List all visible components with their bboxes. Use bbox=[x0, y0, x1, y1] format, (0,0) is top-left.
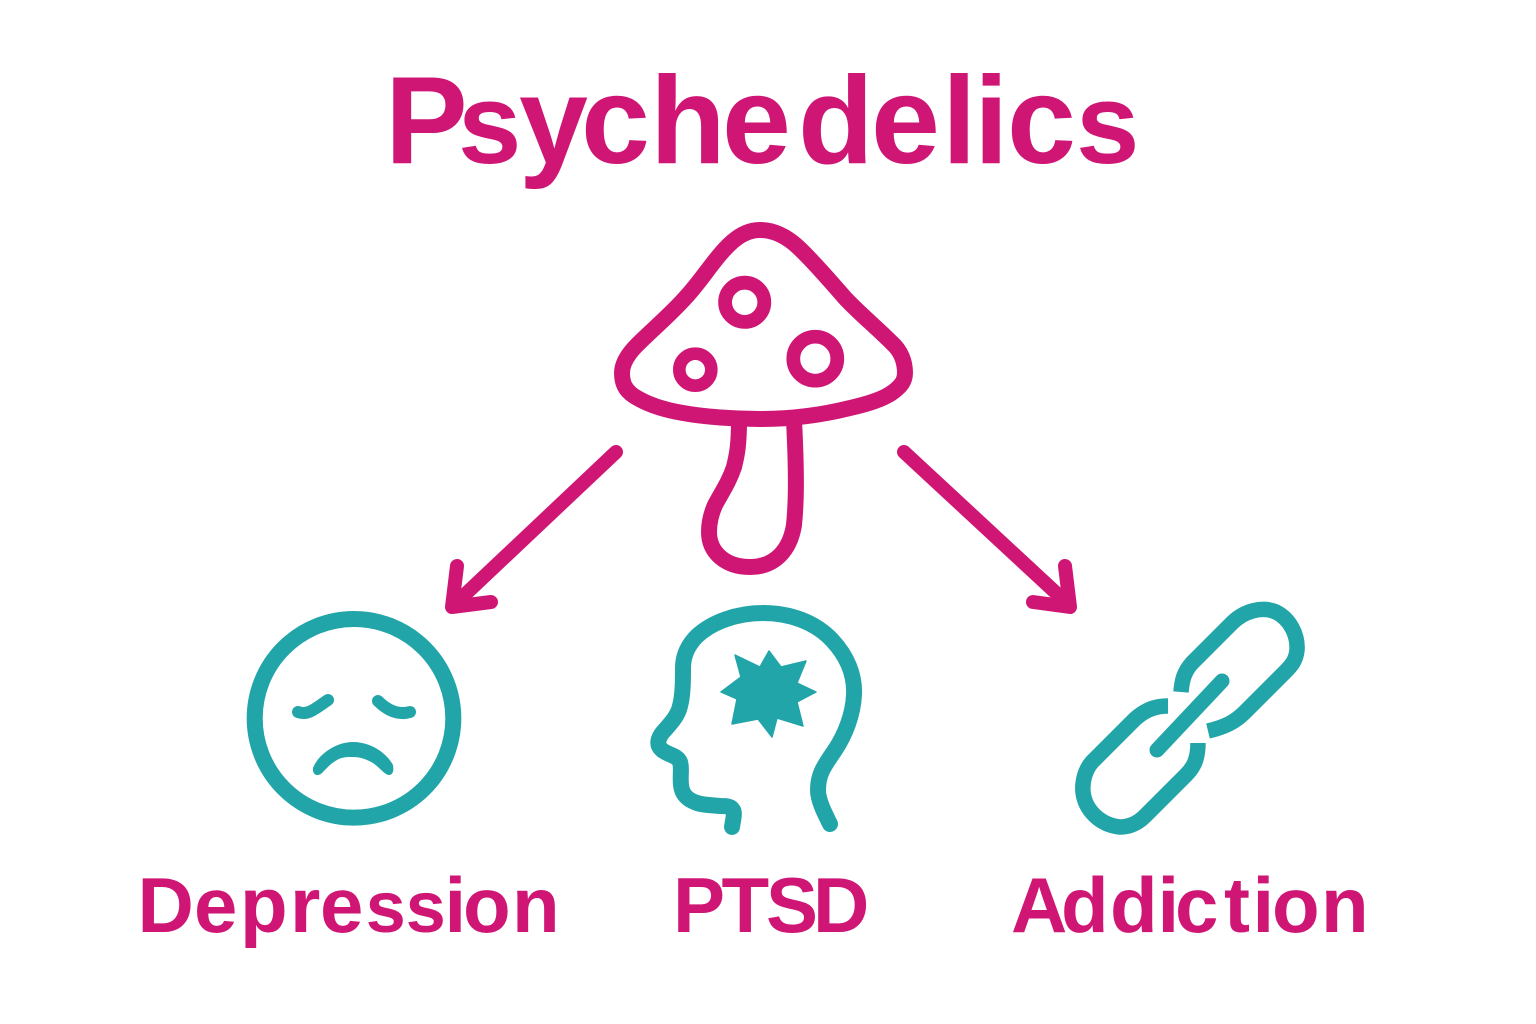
label: depression: Depre bbox=[138, 861, 363, 949]
title: P bbox=[385, 52, 468, 190]
title: s bbox=[458, 61, 521, 188]
label: depression: ion bbox=[444, 861, 560, 949]
icon: broken chain link bbox=[1083, 609, 1297, 827]
label: depression: ss bbox=[366, 868, 446, 948]
label: addiction: Addiction bbox=[1011, 861, 1369, 949]
title: s bbox=[1076, 61, 1139, 188]
icon: sad face bbox=[255, 619, 453, 818]
arrow: to depression bbox=[452, 452, 616, 607]
label: PTSD: PTSD bbox=[673, 861, 869, 949]
icon: mushroom bbox=[622, 230, 905, 567]
title: ychedelic bbox=[519, 52, 1076, 190]
arrow: to addiction bbox=[904, 452, 1070, 607]
icon: burst bbox=[721, 651, 816, 737]
icon: head with burst bbox=[658, 613, 854, 827]
